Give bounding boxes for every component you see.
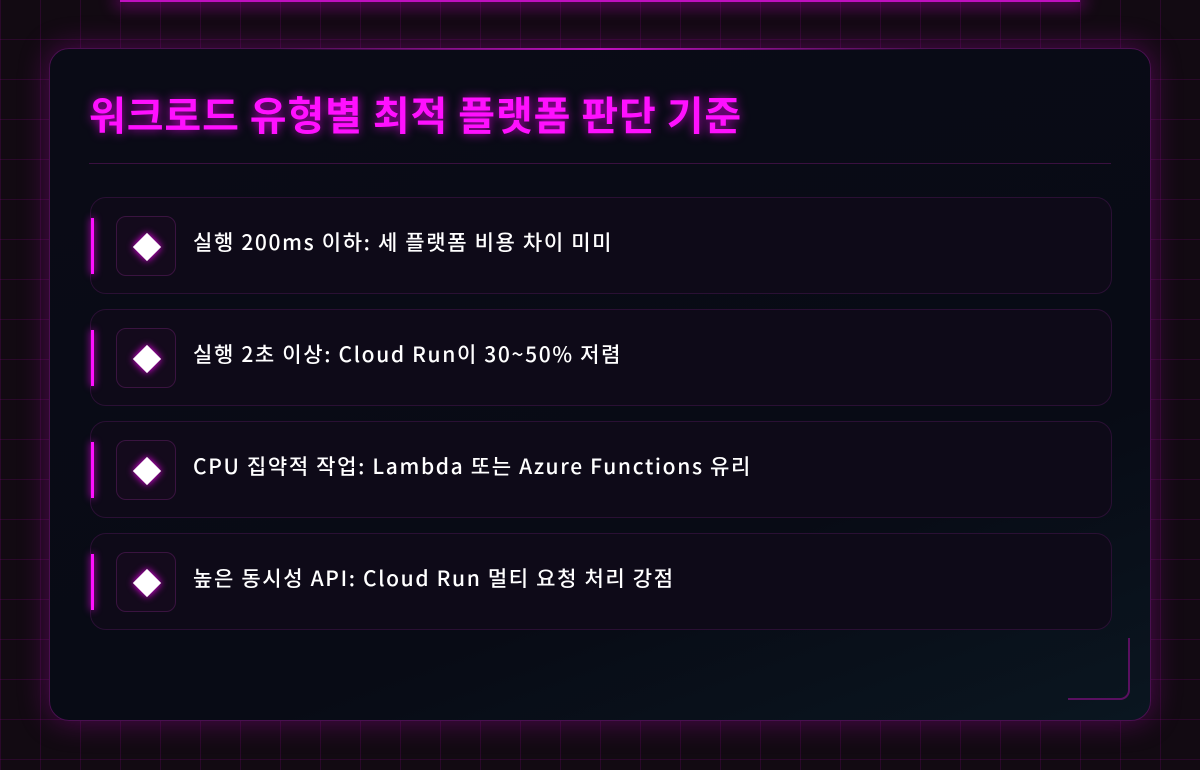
text: 실행 200ms 이하: 세 플랫폼 비용 차이 미미 <box>193 227 613 257</box>
icon: diamond <box>116 216 176 276</box>
icon: diamond <box>116 328 176 388</box>
icon: diamond <box>116 552 176 612</box>
item 2 <box>90 309 1112 406</box>
text: 실행 2초 이상: Cloud Run이 30~50% 저렴 <box>193 339 622 369</box>
title: 워크로드 유형별 최적 플랫폼 판단 기준 <box>89 84 742 142</box>
icon: diamond <box>116 440 176 500</box>
item 3 <box>90 421 1112 518</box>
corner accent <box>1068 638 1130 700</box>
text: CPU 집약적 작업: Lambda 또는 Azure Functions 유리 <box>193 451 752 481</box>
text: 높은 동시성 API: Cloud Run 멀티 요청 처리 강점 <box>193 563 675 593</box>
item 1 <box>90 197 1112 294</box>
item 4 <box>90 533 1112 630</box>
